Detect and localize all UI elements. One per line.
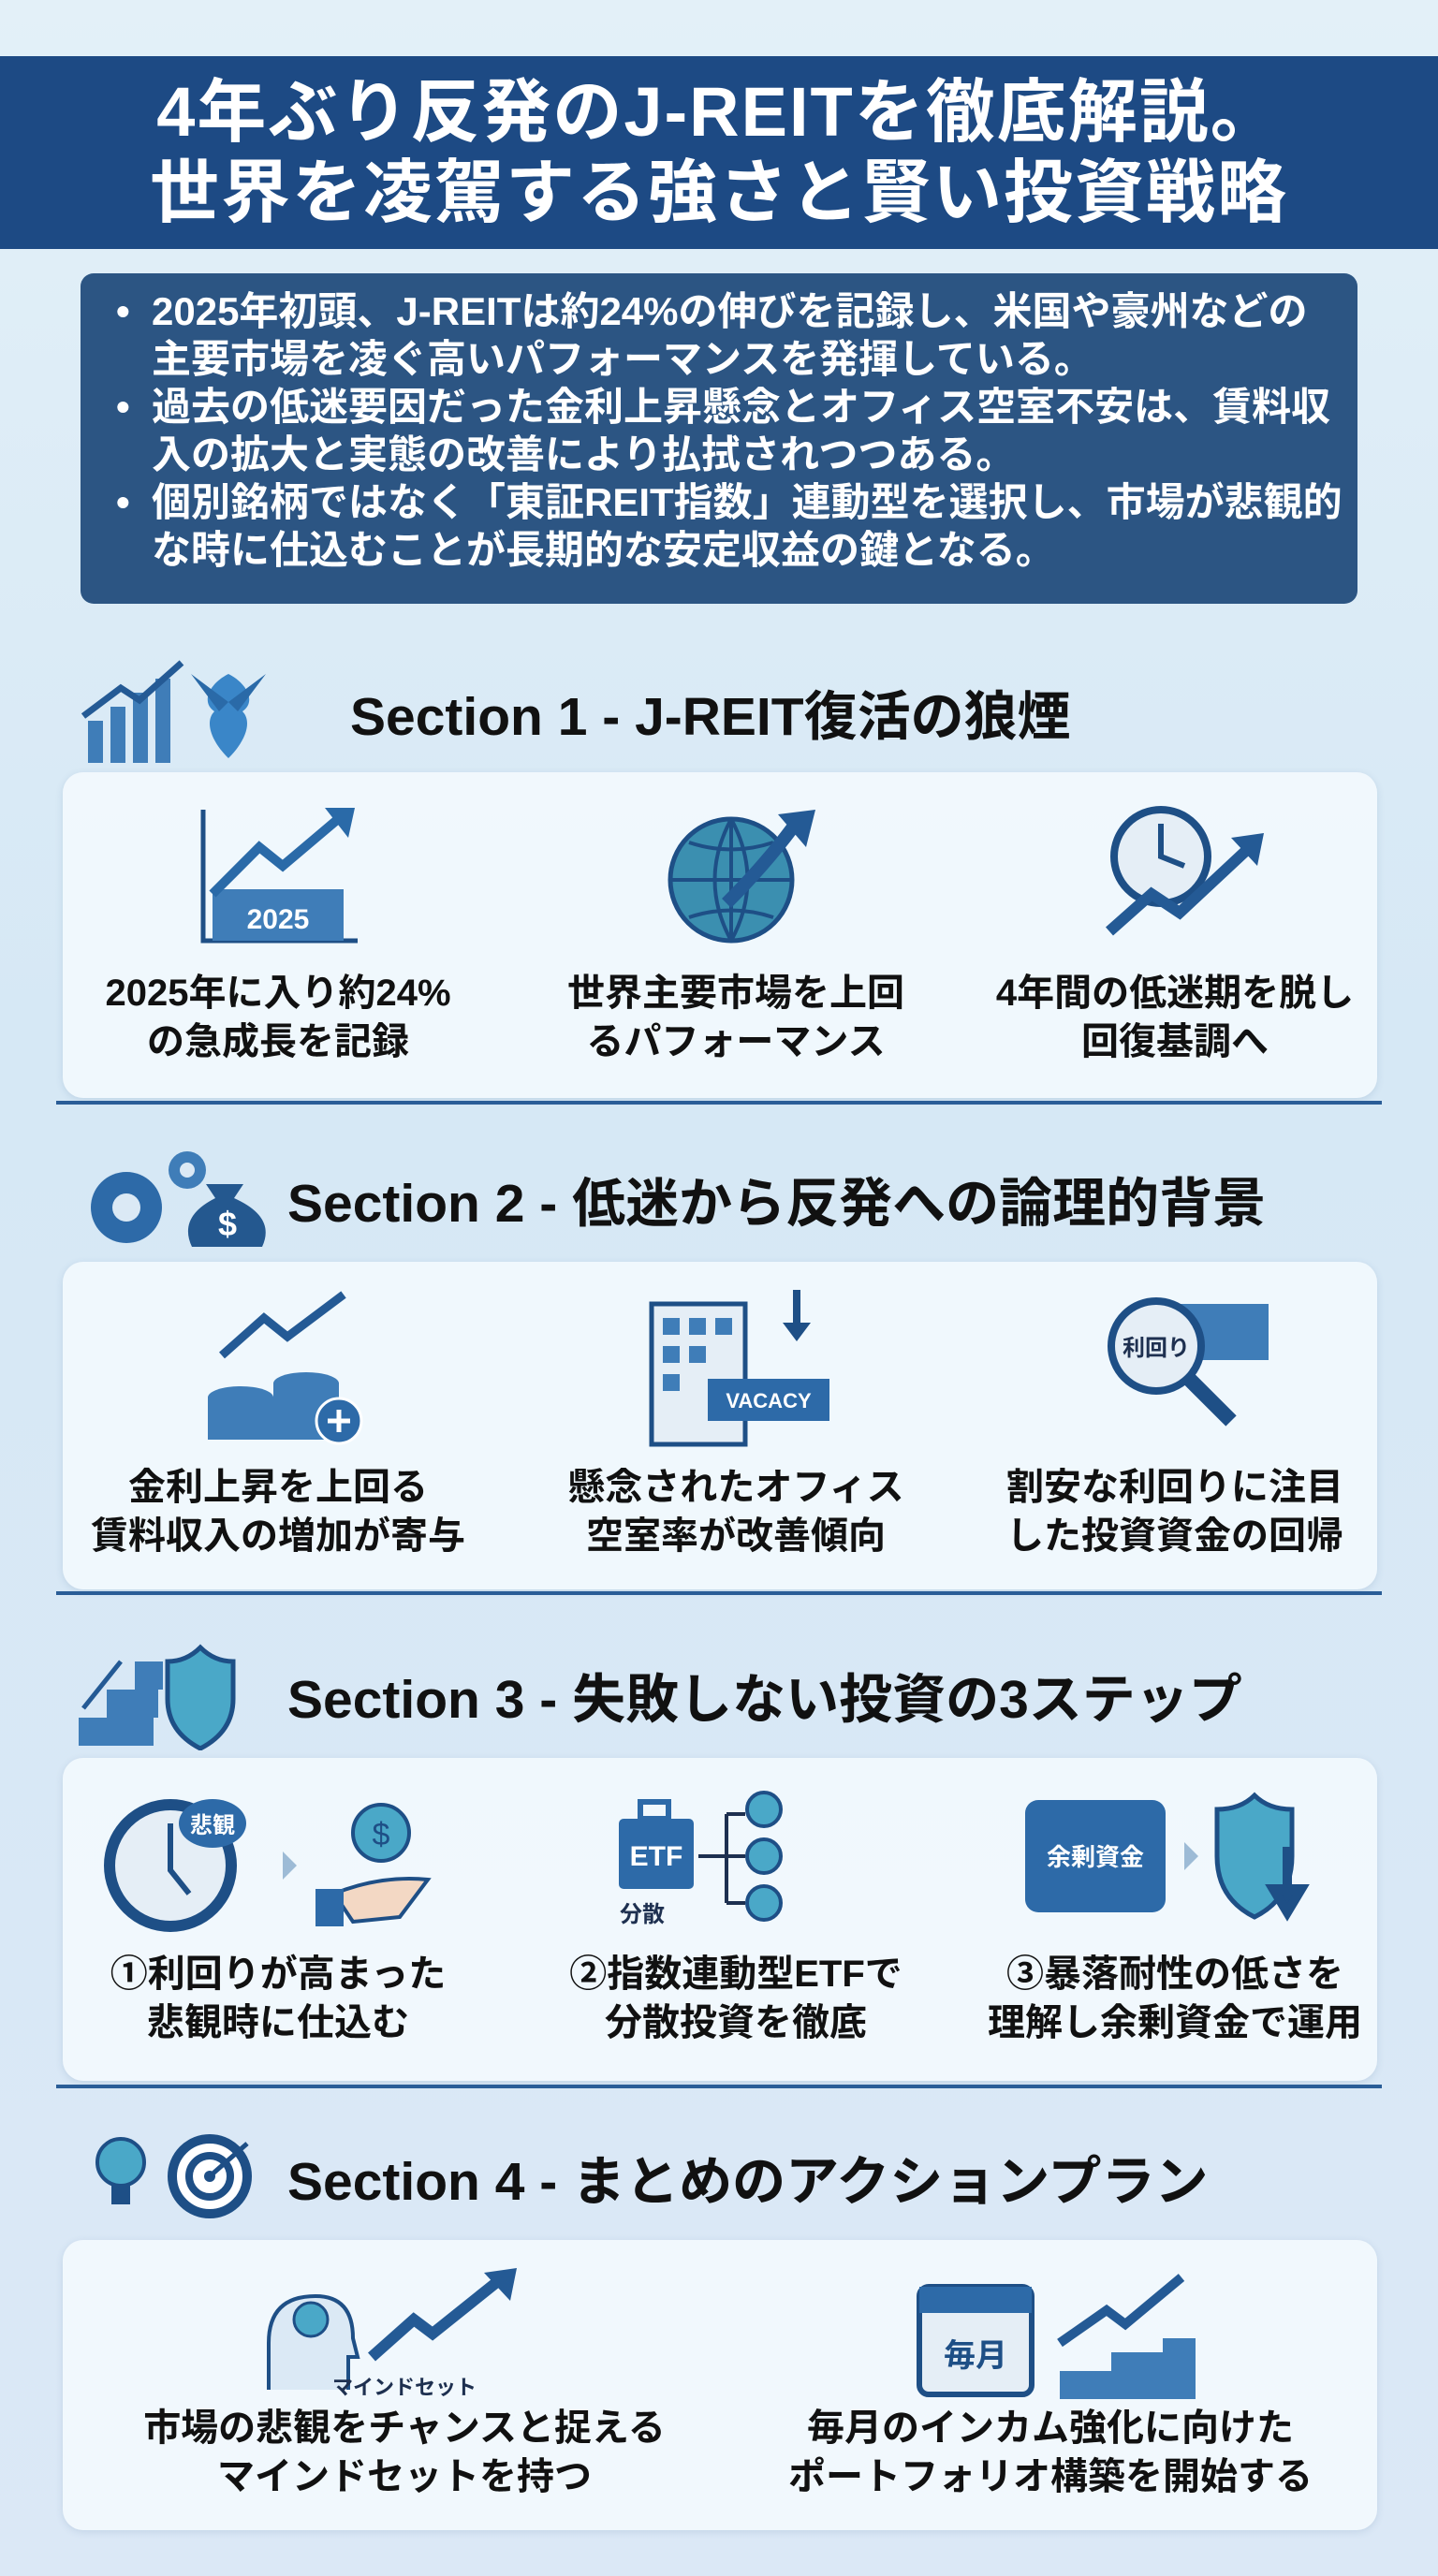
item: global markets: るパフォーマンス [586,1021,886,1062]
item: office vacancy: 懸念されたオフィス [567,1467,904,1508]
item: monthly income [788,2274,1313,2497]
item: office vacancy: 空室率が改善傾向 [586,1515,886,1557]
item: step 1: ①利回りが高まった [110,1954,446,1995]
item: rent income: 金利上昇を上回る [128,1467,428,1508]
item: step 1: $ [373,1817,390,1852]
icon: gears and money bag: $ [218,1205,237,1243]
item: global markets [567,810,904,1062]
item: step 2 [569,1791,902,2043]
item: 2025 growth: の急成長を記録 [147,1021,409,1062]
panel 1 [63,772,1377,1098]
panel 4 [63,2240,1377,2530]
item: yield: した投資資金の回帰 [1006,1515,1343,1557]
item: 2025 growth: 2025年に入り約24% [105,973,451,1014]
section 2 heading: Section 2 - 低迷から反発への論理的背景 [287,1174,1266,1234]
section 4 heading [95,2134,1209,2218]
item: monthly income: 毎月 [944,2338,1007,2374]
section 3 heading: Section 3 - 失敗しない投資の3ステップ [287,1670,1242,1730]
icon: bulb and target [95,2134,252,2218]
item: mindset: マインドセットを持つ [217,2456,592,2497]
item: global markets: 世界主要市場を上回 [567,973,904,1014]
item: step 2: ETF [630,1841,682,1872]
item: step 3: ③暴落耐性の低さを [1006,1954,1343,1995]
summary box: 主要市場を凌ぐ高いパフォーマンスを発揮している。 [152,337,1093,381]
icon: gears and money bag [91,1151,266,1247]
summary box: 過去の低迷要因だった金利上昇懸念とオフィス空室不安は、賃料収 [152,385,1330,429]
item: recovery [996,806,1354,1062]
item: recovery: 4年間の低迷期を脱し [996,973,1354,1014]
summary box: 個別銘柄ではなく「東証REIT指数」連動型を選択し、市場が悲観的 [152,480,1343,524]
item: step 1 [104,1799,446,2043]
item: rent income: 賃料収入の増加が寄与 [91,1515,465,1557]
title banner: 世界を凌駕する強さと賢い投資戦略 [150,154,1288,231]
item: rent income [91,1291,465,1557]
item: step 1: 悲観 [190,1813,235,1838]
item: recovery: 回復基調へ [1081,1021,1269,1062]
item: step 3: 理解し余剰資金で運用 [988,2002,1362,2043]
item: yield [1006,1297,1343,1557]
item: office vacancy [567,1290,904,1557]
section 2 heading [91,1151,1266,1247]
item: step 3: 余剰資金 [1047,1843,1144,1871]
section 1 heading: Section 1 - J-REIT復活の狼煙 [350,687,1071,747]
item: step 2: 分散 [620,1902,665,1927]
item: yield: 利回り [1123,1336,1190,1361]
section 3 heading [79,1644,1242,1750]
summary box: 入の拡大と実態の改善により払拭されつつある。 [152,432,1015,476]
summary box: 2025年初頭、J-REITは約24%の伸びを記録し、米国や豪州などの [152,289,1308,333]
item: mindset: マインドセット [332,2376,477,2399]
panel 3 [63,1758,1377,2081]
title banner [0,56,1438,249]
section 4 heading: Section 4 - まとめのアクションプラン [287,2152,1209,2212]
item: 2025 growth [105,808,451,1062]
item: yield: 割安な利回りに注目 [1006,1467,1343,1508]
summary box [81,273,1357,604]
panel 2 [63,1262,1377,1589]
item: monthly income: ポートフォリオ構築を開始する [788,2456,1313,2497]
item: step 2: 分散投資を徹底 [605,2002,867,2043]
icon: steps and shield [79,1644,236,1750]
item: monthly income: 毎月のインカム強化に向けた [807,2408,1294,2449]
item: step 3 [988,1792,1362,2043]
summary box: な時に仕込むことが長期的な安定収益の鍵となる。 [152,528,1055,572]
item: mindset [143,2268,666,2497]
item: mindset: 市場の悲観をチャンスと捉える [143,2408,666,2449]
item: 2025 growth: 2025 [247,904,309,935]
section 1 heading [81,660,1071,763]
title banner: 4年ぶり反発のJ-REITを徹底解説。 [156,73,1282,151]
icon: chart and phoenix [81,660,266,763]
item: step 2: ②指数連動型ETFで [569,1954,902,1995]
item: step 1: 悲観時に仕込む [147,2002,409,2043]
item: office vacancy: VACACY [726,1389,812,1412]
